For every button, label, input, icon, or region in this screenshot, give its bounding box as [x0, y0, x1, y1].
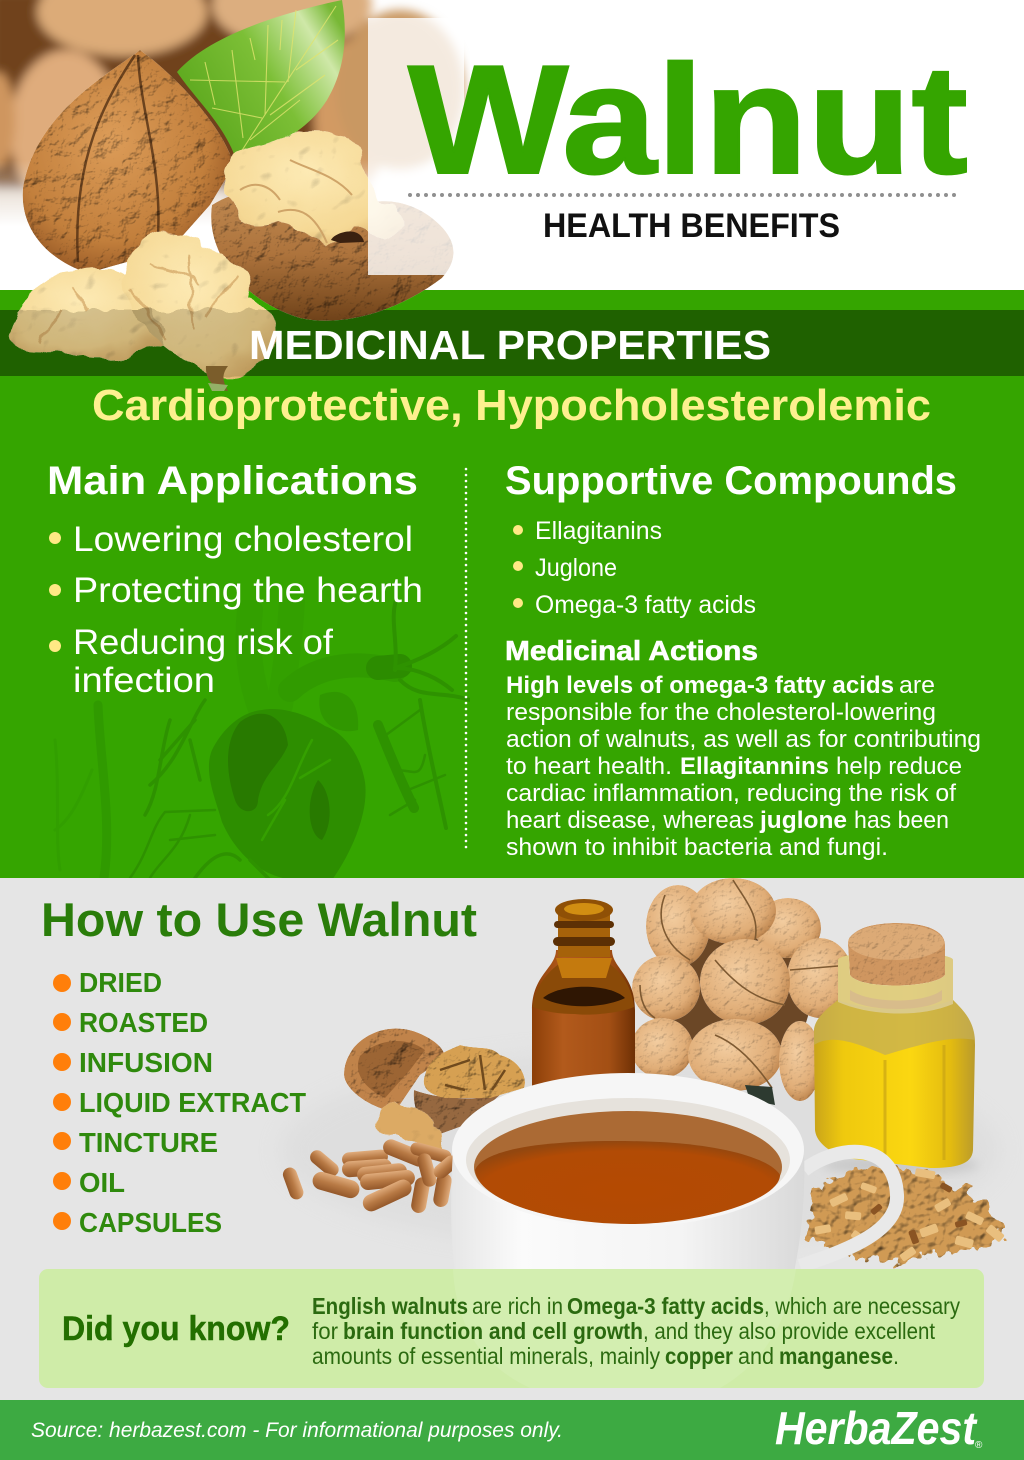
- application list: infection: [73, 661, 215, 700]
- logo: HerbaZest: HerbaZest: [775, 1402, 978, 1454]
- application list: Reducing risk of: [73, 623, 333, 662]
- subtitle: health benefits: HEALTH BENEFITS: [543, 207, 840, 245]
- illustration: cracked walnut half with kernel: [211, 131, 454, 321]
- bullet markers: [49, 532, 61, 652]
- logo: HerbaZest: ®: [975, 1440, 983, 1451]
- heading: main applications: Main Applications: [47, 459, 418, 503]
- orange bullets: [53, 974, 71, 1230]
- paragraph: medicinal actions: help reduce: [836, 753, 962, 780]
- illustration: cracked walnut and kernels: [344, 1029, 525, 1147]
- callout text: [312, 1293, 960, 1369]
- list: preparation forms: ROASTED: [79, 1007, 208, 1038]
- callout text: manganese: [779, 1343, 893, 1369]
- paragraph: medicinal actions: to heart health.: [506, 753, 672, 780]
- illustration: whole walnut: [23, 50, 234, 273]
- compound list: Omega-3 fatty acids: [535, 591, 756, 619]
- callout text: , which are necessary: [764, 1293, 960, 1319]
- heading: medicinal actions: Medicinal Actions: [505, 635, 758, 666]
- application list: [73, 520, 423, 700]
- callout text: Omega-3 fatty acids: [567, 1293, 764, 1319]
- dotted column divider: [465, 469, 467, 852]
- illustration: pile of walnuts: [631, 878, 853, 1105]
- heading: how to use walnut: How to Use Walnut: [41, 893, 477, 946]
- callout text: brain function and cell growth: [343, 1318, 643, 1344]
- paragraph: medicinal actions: juglone: [759, 807, 847, 834]
- list: preparation forms: [53, 967, 306, 1238]
- paragraph: medicinal actions: are: [899, 672, 935, 699]
- footer bar: [0, 1400, 1024, 1460]
- paragraph: medicinal actions: has been: [854, 807, 949, 834]
- panel: how to use background: [0, 878, 1024, 1400]
- callout text: for: [312, 1318, 338, 1344]
- callout box: [39, 1269, 984, 1388]
- soft shadow under product photo: [280, 1050, 1000, 1250]
- list: preparation forms: CAPSULES: [79, 1207, 222, 1238]
- callout text: , and they also provide excellent: [643, 1318, 936, 1344]
- callout text: and: [738, 1343, 774, 1369]
- dotted title divider: [410, 193, 962, 197]
- title: Walnut: Walnut: [408, 33, 968, 206]
- callout text: .: [893, 1343, 899, 1369]
- illustration: white teacup with tea: [451, 1073, 897, 1290]
- icon: heart illustration watermark: [55, 600, 470, 880]
- compound list: [535, 517, 756, 619]
- paragraph: medicinal actions: heart disease, whereas: [506, 807, 754, 834]
- list: preparation forms: INFUSION: [79, 1047, 213, 1078]
- translucent white title backing: [368, 18, 464, 275]
- illustration: capsules: [281, 1137, 461, 1214]
- list: preparation forms: TINCTURE: [79, 1127, 218, 1158]
- heading: supportive compounds: Supportive Compounds: [505, 459, 957, 503]
- illustration: walnut kernels: [12, 234, 275, 391]
- application list: Protecting the hearth: [73, 571, 423, 610]
- list: preparation forms: OIL: [79, 1167, 125, 1198]
- illustration: amber extract bottle: [532, 899, 635, 1105]
- green medicinal properties panel: [0, 290, 1024, 878]
- compound list: Ellagitanins: [535, 517, 662, 545]
- paragraph: medicinal actions: [506, 672, 981, 861]
- subheading: properties list: Cardioprotective, Hypocholesterolemic: [92, 381, 931, 430]
- paragraph: medicinal actions: responsible for the cholesterol-lowering: [506, 699, 936, 726]
- illustration: chopped walnut pieces: [805, 1166, 1005, 1262]
- footer source text: Source: herbazest.com - For informational purposes only.: [31, 1419, 563, 1442]
- callout text: are rich in: [472, 1293, 563, 1319]
- callout text: amounts of essential minerals, mainly: [312, 1343, 660, 1369]
- callout text: copper: [665, 1343, 733, 1369]
- paragraph: medicinal actions: High levels of omega-3 fatty acids: [506, 672, 894, 699]
- dark title band: [0, 310, 1024, 376]
- paragraph: medicinal actions: cardiac inflammation, reducing the risk of: [506, 780, 956, 807]
- compound bullets: [513, 525, 523, 608]
- illustration: green walnut leaf: [177, 0, 345, 162]
- compound list: Juglone: [535, 554, 617, 582]
- list: preparation forms: LIQUID EXTRACT: [79, 1087, 306, 1118]
- paragraph: medicinal actions: action of walnuts, as well as for contributing: [506, 726, 981, 753]
- column: main applications: [47, 459, 423, 700]
- callout heading: Did you know?: [62, 1310, 290, 1348]
- heading: medicinal properties: MEDICINAL PROPERTIES: [249, 322, 771, 368]
- paragraph: medicinal actions: shown to inhibit bacteria and fungi.: [506, 834, 888, 861]
- application list: Lowering cholesterol: [73, 520, 413, 559]
- callout text: English walnuts: [312, 1293, 468, 1319]
- column: supportive compounds: [505, 459, 981, 861]
- callout: did you know: [39, 1269, 984, 1388]
- cup ghost inside callout: [453, 1269, 796, 1388]
- list: preparation forms: DRIED: [79, 967, 162, 998]
- illustration: yellow oil jar with cork: [814, 923, 978, 1175]
- paragraph: medicinal actions: Ellagitannins: [680, 753, 829, 780]
- header photo backdrop: blurred walnuts: [0, 0, 470, 219]
